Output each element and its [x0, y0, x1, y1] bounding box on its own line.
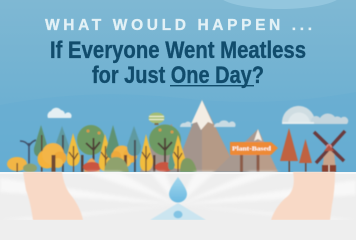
- tree: small yellow: [7, 157, 27, 172]
- bush: red: [83, 162, 101, 172]
- sign: plant-based: [230, 142, 278, 172]
- tree: yellow: [99, 134, 113, 172]
- tree: teal cone: [127, 126, 141, 172]
- cloud: left: [47, 108, 72, 118]
- mountain: large: [174, 100, 238, 172]
- water drop: small: [174, 211, 182, 218]
- mountain: behind trees: [140, 124, 181, 172]
- tree: teal small: [168, 150, 175, 170]
- splash under drop: [150, 203, 206, 220]
- tree: green round: [149, 124, 181, 164]
- tree: orange-red small: [299, 139, 312, 172]
- street lamp: [20, 140, 36, 172]
- tree: orange cluster: [111, 146, 137, 172]
- water drop: large: [169, 177, 187, 202]
- sign: plant-based: Plant-Based: [232, 146, 272, 152]
- tree: orange-red tall: [280, 128, 298, 172]
- bush: red: [155, 162, 173, 172]
- tree: green round: [77, 125, 105, 172]
- post: [153, 155, 156, 172]
- heading: what would happen: WHAT WOULD HAPPEN ...: [45, 17, 312, 34]
- hand: right: [271, 172, 335, 220]
- zeppelin: [148, 112, 164, 125]
- windmill: [314, 131, 345, 172]
- ground panel with rays: [0, 172, 356, 220]
- title line 1: If Everyone Went Meatless: [50, 37, 306, 64]
- mountain: small: [214, 129, 278, 172]
- cloud: large right: [282, 106, 348, 124]
- bush: green: [104, 157, 129, 172]
- title line 2: for Just One Day?: [92, 62, 264, 89]
- sky background: [0, 0, 356, 173]
- tree: yellow: [67, 133, 80, 172]
- landscape: [7, 100, 348, 172]
- tree: yellow: [140, 134, 153, 172]
- mound: [84, 158, 100, 172]
- tree: orange cluster: [38, 143, 66, 172]
- bush: green small: [23, 164, 37, 172]
- tree: teal cone: [55, 126, 69, 172]
- tree: green cone: [34, 125, 48, 172]
- post: [81, 155, 84, 172]
- hand: left: [23, 172, 83, 220]
- clouds: beside mountain: [180, 120, 236, 127]
- tree: yellow: [172, 135, 185, 172]
- tree: green cone: [106, 125, 120, 159]
- bush: green: [180, 158, 197, 172]
